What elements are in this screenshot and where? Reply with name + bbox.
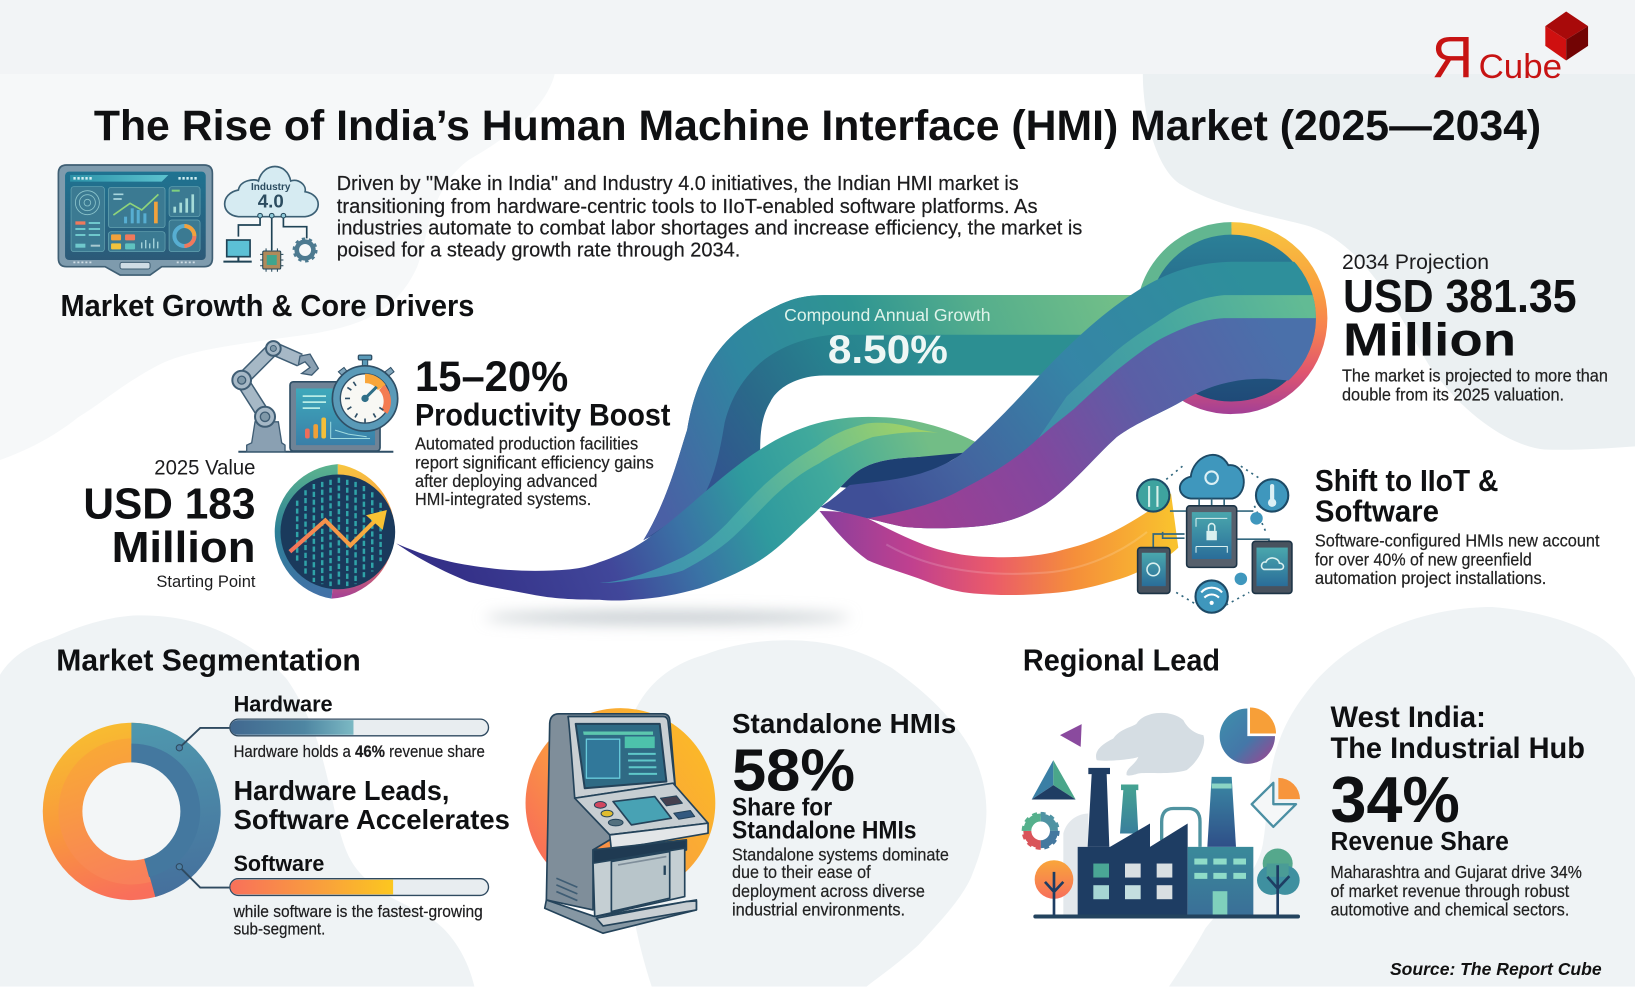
icon: HMI monitor <box>58 165 212 275</box>
stat: standalone HMIs: deployment across diverse <box>732 881 925 901</box>
factory building <box>1078 824 1188 915</box>
stat: 2025 value <box>83 457 256 591</box>
swoosh light stripe <box>600 423 938 583</box>
icon: IIoT network <box>1137 455 1292 613</box>
logo wordmark: Я <box>1432 25 1473 90</box>
decorative triangle <box>1060 724 1082 747</box>
stat: shift to IIoT and software: Shift to IIoT & <box>1315 465 1498 498</box>
stat: West India: The Industrial Hub <box>1331 733 1585 765</box>
logo: Cube <box>1479 48 1562 86</box>
description <box>415 434 654 509</box>
value: 15–20% <box>415 353 568 401</box>
hardware bar: Hardware <box>234 691 333 716</box>
software bar: Software <box>234 851 324 876</box>
stat: 2025 value: Starting Point <box>156 572 256 591</box>
stat: West India: automotive and chemical sectors. <box>1331 900 1569 920</box>
stat: standalone HMIs: Standalone HMIs <box>732 817 917 845</box>
CAGR label <box>784 305 991 372</box>
stat: 2025 value: 2025 Value <box>154 457 255 480</box>
stat: standalone HMIs: Share for <box>732 794 832 822</box>
heading: Market Growth & Core Drivers: Market Growth & Core Drivers <box>60 290 474 323</box>
description: Automated production facilities <box>415 434 638 454</box>
stat: West India: Revenue Share <box>1331 826 1509 856</box>
ground line <box>1033 915 1300 919</box>
segmentation headline <box>234 775 510 835</box>
main diagonal strand <box>821 262 1324 528</box>
stat: 2025 value: USD 183 <box>83 479 255 528</box>
stat: West India: of market revenue through robust <box>1331 881 1570 901</box>
icon: Industry 4.0 cloud: Industry <box>251 182 291 193</box>
software bar <box>230 851 489 939</box>
intro text: Driven by "Make in India" and Industry 4.0 initiatives, the Indian HMI market is <box>337 173 1019 195</box>
end ring <box>1142 228 1321 408</box>
CAGR label: Compound Annual Growth <box>784 305 991 325</box>
intro text <box>337 173 1082 262</box>
donut chart <box>43 723 229 900</box>
description: after deploying advanced <box>415 471 597 491</box>
intro text: industries automate to combat labor shortages and increase efficiency, the market is <box>337 218 1082 240</box>
stat: 2034 projection: The market is projected to more than <box>1342 366 1608 386</box>
upper arch strand <box>643 295 1147 540</box>
stat: shift to IIoT and software: for over 40% of new greenfield <box>1315 549 1532 569</box>
pie chart <box>1220 708 1275 764</box>
CAGR label: 8.50% <box>828 328 948 372</box>
title: The Rise of India’s Human Machine Interface (HMI) Market (2025—2034) <box>94 102 1541 150</box>
stat: West India: West India: <box>1331 702 1486 734</box>
hardware bar: Hardware holds a 46% revenue share <box>234 742 485 761</box>
stat: 2034 projection: USD 381.35 <box>1343 270 1577 322</box>
stat: 2034 projection: Million <box>1343 314 1516 366</box>
icon: robot arm and stopwatch <box>232 341 398 452</box>
stat: 2025 value: Million <box>112 523 255 572</box>
stat: West India: 34% <box>1331 763 1460 836</box>
software bar: while software is the fastest-growing <box>233 902 483 921</box>
swoosh strand: tail and green arch <box>396 417 978 600</box>
logo <box>1432 11 1588 90</box>
stat: shift to IIoT and software <box>1315 465 1600 588</box>
icon: Industry 4.0 cloud: 4.0 <box>258 191 284 212</box>
chimneys <box>1088 768 1110 847</box>
lower rainbow strand <box>820 493 1178 595</box>
segmentation headline: Hardware Leads, <box>234 775 449 806</box>
source note: Source: The Report Cube <box>1390 959 1602 979</box>
icon: Industry 4.0 cloud <box>223 166 318 272</box>
stat: 2034 projection: 2034 Projection <box>1342 251 1489 274</box>
stat: standalone HMIs <box>732 708 956 920</box>
logo cube <box>1545 11 1588 60</box>
intro text: poised for a steady growth rate through 2034. <box>337 240 740 262</box>
software bar: sub-segment. <box>234 920 325 939</box>
heading: Regional Lead: Regional Lead <box>1023 645 1220 678</box>
description: HMI-integrated systems. <box>415 489 591 509</box>
description: report significant efficiency gains <box>415 452 654 472</box>
stat: shift to IIoT and software: Software <box>1315 495 1439 528</box>
stat: West India: Maharashtra and Gujarat drive 34% <box>1331 862 1582 882</box>
windows <box>1093 859 1246 915</box>
smoke cloud <box>1096 713 1204 776</box>
stat: standalone HMIs: Standalone systems dominate <box>732 844 949 864</box>
envelope tag <box>1252 783 1296 827</box>
label: Productivity Boost <box>415 398 671 433</box>
rear haze <box>1063 814 1088 915</box>
stat: 2034 projection <box>1342 251 1608 405</box>
pyramid <box>1032 760 1053 800</box>
stat: standalone HMIs: 58% <box>732 737 855 804</box>
hardware segment <box>131 723 221 897</box>
trees <box>1035 860 1073 899</box>
segmentation headline: Software Accelerates <box>234 804 510 835</box>
shadow under ribbon <box>485 611 850 624</box>
icon: standalone HMI kiosk <box>526 708 715 933</box>
stat: standalone HMIs: Standalone HMIs <box>732 708 956 739</box>
heading: Market Segmentation: Market Segmentation <box>56 645 361 678</box>
software segment <box>43 723 220 900</box>
stat: West India <box>1331 702 1585 920</box>
icon: factory illustration <box>1024 707 1300 919</box>
stat: shift to IIoT and software: Software-configured HMIs new account <box>1315 531 1600 551</box>
stat: productivity boost <box>415 353 671 509</box>
gear <box>1024 814 1057 848</box>
icon: chart circle <box>275 464 395 599</box>
stat: shift to IIoT and software: automation project installations. <box>1315 568 1546 588</box>
stat: standalone HMIs: due to their ease of <box>732 862 871 882</box>
stat: 2034 projection: double from its 2025 valuation. <box>1342 385 1564 405</box>
dark underside <box>840 453 965 488</box>
stat: standalone HMIs: industrial environments. <box>732 900 905 920</box>
footer strip <box>0 987 1635 995</box>
hardware bar <box>230 691 489 761</box>
header band <box>0 0 1635 74</box>
growth ribbon <box>396 228 1324 600</box>
intro text: transitioning from hardware-centric tools to IIoT-enabled software platforms. As <box>337 196 1038 218</box>
